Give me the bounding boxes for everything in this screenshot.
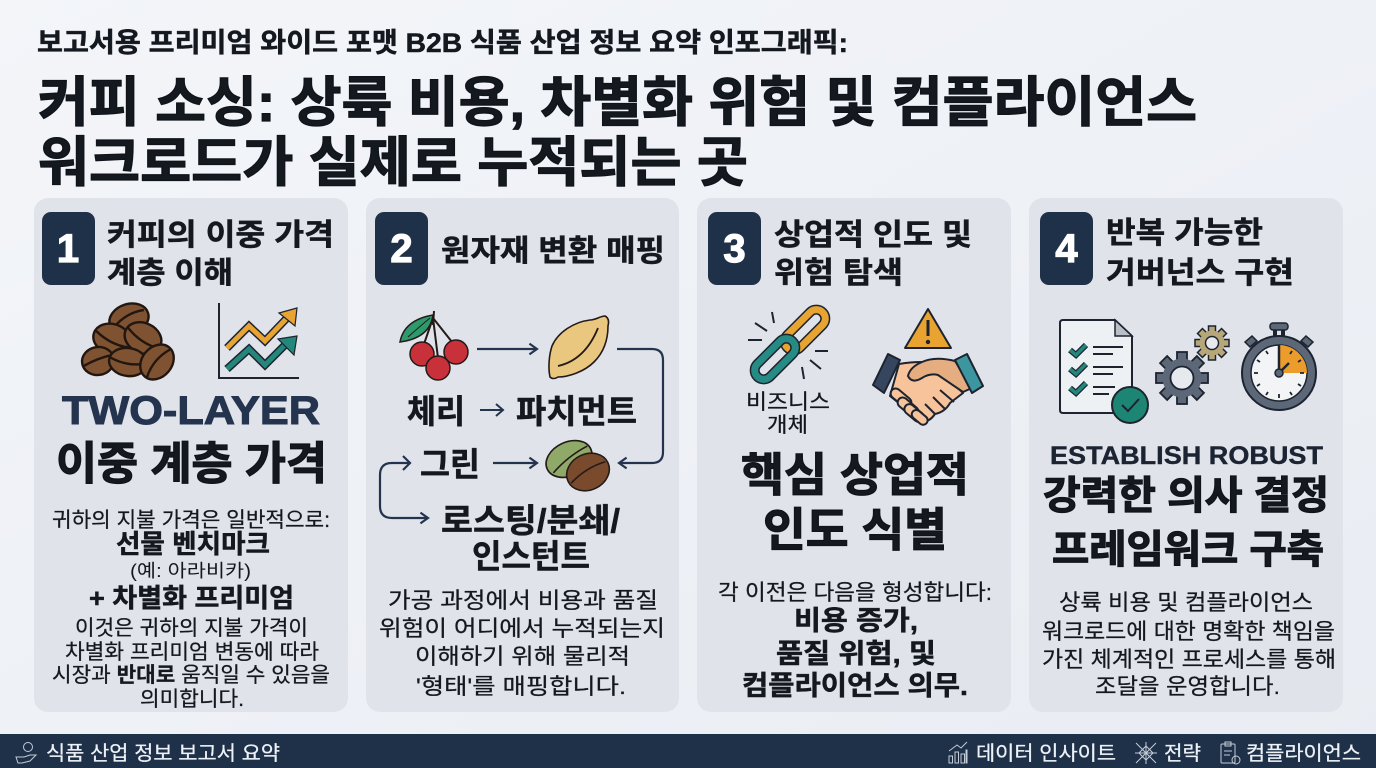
arrow: green to beans — [493, 462, 537, 464]
panel 4 heading: 거버넌스 구현 — [1106, 257, 1294, 290]
icon: handshake — [873, 354, 983, 427]
footer label: strategy: 전략 — [1164, 742, 1201, 765]
number badge 2: 2 — [390, 227, 413, 271]
number badge 4: 4 — [1055, 227, 1078, 271]
icon: compliance clipboard — [1221, 742, 1240, 764]
panel 1 body text: 이것은 귀하의 지불 가격이 — [75, 617, 308, 640]
icon: green and roasted beans — [540, 433, 616, 498]
arrow: green to roast loop — [380, 463, 428, 518]
panel 1 body text: 시장과 반대로 움직일 수 있음을 — [52, 664, 330, 687]
panel 1 heading: 계층 이해 — [107, 257, 233, 290]
icon: rising price chart — [219, 303, 299, 378]
label: cherry to parchment: 체리 — [407, 393, 465, 430]
panel 3: commercial delivery and risk — [697, 198, 1011, 712]
panel 4 body text: 워크로드에 대한 명확한 책임을 — [1042, 619, 1335, 644]
panel 3 body text: 비용 증가, — [794, 606, 918, 636]
label: cherry to parchment: 파치먼트 — [516, 393, 637, 430]
panel 2 body text: 위험이 어디에서 누적되는지 — [379, 616, 665, 641]
main title: 커피 소싱: 상륙 비용, 차별화 위험 및 컴플라이언스 — [38, 73, 1197, 133]
label: green: 그린 — [420, 446, 480, 483]
big label: core commercial delivery: 핵심 상업적 — [741, 449, 969, 501]
label: roast grind instant — [441, 502, 620, 575]
number badge 3: 3 — [723, 227, 746, 271]
panel 2: raw material transformation — [366, 198, 679, 712]
panel 3 body text — [718, 580, 992, 701]
panel 3 body text: 컴플라이언스 의무. — [742, 671, 968, 701]
arrow: cherry to parchment — [477, 348, 537, 350]
icon: chain link — [748, 306, 829, 383]
icon: parchment bean — [549, 316, 609, 378]
panel 2 body text: '형태'를 매핑합니다. — [416, 674, 626, 699]
label: business entity: 비즈니스 — [746, 391, 830, 414]
panel 2 heading: 원자재 변환 매핑 — [441, 235, 665, 268]
panel 4 body text: 상륙 비용 및 컴플라이언스 — [1059, 590, 1313, 615]
panel 4 heading: 반복 가능한 — [1106, 217, 1263, 250]
icon: warning triangle — [905, 309, 951, 348]
main title: 워크로드가 실제로 누적되는 곳 — [38, 133, 748, 193]
big label: establish robust framework: 강력한 의사 결정 — [1043, 475, 1329, 518]
icon: coffee cherries — [400, 311, 468, 380]
icon: checklist document — [1060, 320, 1148, 423]
panel 3 body text: 품질 위험, 및 — [776, 639, 936, 669]
big label: core commercial delivery: 인도 식별 — [763, 504, 947, 556]
panel 3 body text: 각 이전은 다음을 형성합니다: — [718, 580, 992, 605]
big label: two-layer: TWO-LAYER — [62, 389, 320, 433]
panel 2 body text — [379, 588, 665, 699]
panel 1 heading — [107, 219, 334, 290]
number badge 3 — [708, 212, 761, 285]
icon: gears — [1156, 326, 1229, 404]
footer label: data insight: 데이터 인사이트 — [976, 742, 1116, 765]
big label: two-layer: 이중 계층 가격 — [56, 438, 327, 489]
number badge 1 — [42, 212, 95, 285]
panel 4 body text: 가진 체계적인 프로세스를 통해 — [1042, 647, 1336, 672]
icon: data chart — [949, 742, 967, 763]
main title — [38, 73, 1197, 193]
eyebrow heading: 보고서용 프리미엄 와이드 포맷 B2B 식품 산업 정보 요약 인포그래픽: — [37, 28, 848, 58]
arrow: parchment down to beans — [617, 349, 663, 463]
number badge 4 — [1040, 212, 1093, 285]
panel 4 body text: 조달을 운영합니다. — [1095, 674, 1280, 699]
panel 1 body text: 귀하의 지불 가격은 일반적으로: — [52, 509, 330, 532]
icon: strategy network — [1135, 742, 1157, 764]
panel 1 body text: 선물 벤치마크 — [116, 529, 270, 559]
number badge 1: 1 — [57, 227, 79, 271]
icon: stopwatch — [1242, 323, 1316, 410]
panel 4 body text — [1042, 590, 1336, 699]
arrow head at green — [403, 456, 410, 470]
icon: hand holding coin — [16, 742, 36, 763]
panel 1: two-layer pricing — [34, 198, 348, 712]
number badge 2 — [375, 212, 428, 285]
icon: coffee beans pile — [80, 299, 181, 386]
panel 3 heading: 위험 탐색 — [774, 257, 903, 290]
big label: establish robust framework: 프레임워크 구축 — [1052, 529, 1324, 572]
footer bar — [0, 734, 1376, 768]
label: business entity: 개체 — [767, 414, 808, 437]
panel 2 body text: 가공 과정에서 비용과 품질 — [388, 588, 658, 613]
panel 3 heading: 상업적 인도 및 — [774, 219, 972, 252]
panel 1 heading: 커피의 이중 가격 — [107, 219, 334, 252]
panel 1 body text: 차별화 프리미엄 변동에 따라 — [65, 641, 319, 664]
big label: two-layer — [56, 389, 327, 489]
label: business entity — [746, 391, 830, 437]
big label: core commercial delivery — [741, 449, 969, 556]
panel 1 body text — [52, 509, 330, 711]
label: cherry to parchment — [407, 393, 637, 430]
panel 1 body text: (예: 아라비카) — [130, 561, 251, 581]
panel 1 body text: 의미합니다. — [140, 688, 244, 711]
big label: establish robust framework: ESTABLISH ROBUST — [1050, 442, 1323, 470]
panel 1 body text: + 차별화 프리미엄 — [89, 583, 294, 613]
panel 4 heading — [1106, 217, 1294, 290]
label: roast grind instant: 인스턴트 — [472, 538, 590, 575]
panel 2 body text: 이해하기 위해 물리적 — [415, 644, 630, 669]
panel 4: repeatable governance — [1029, 198, 1343, 712]
footer left label: 식품 산업 정보 보고서 요약 — [46, 742, 280, 765]
big label: establish robust framework — [1043, 442, 1329, 572]
footer label: compliance: 컴플라이언스 — [1246, 742, 1361, 765]
label: roast grind instant: 로스팅/분쇄/ — [441, 502, 620, 539]
panel 3 heading — [774, 219, 972, 290]
